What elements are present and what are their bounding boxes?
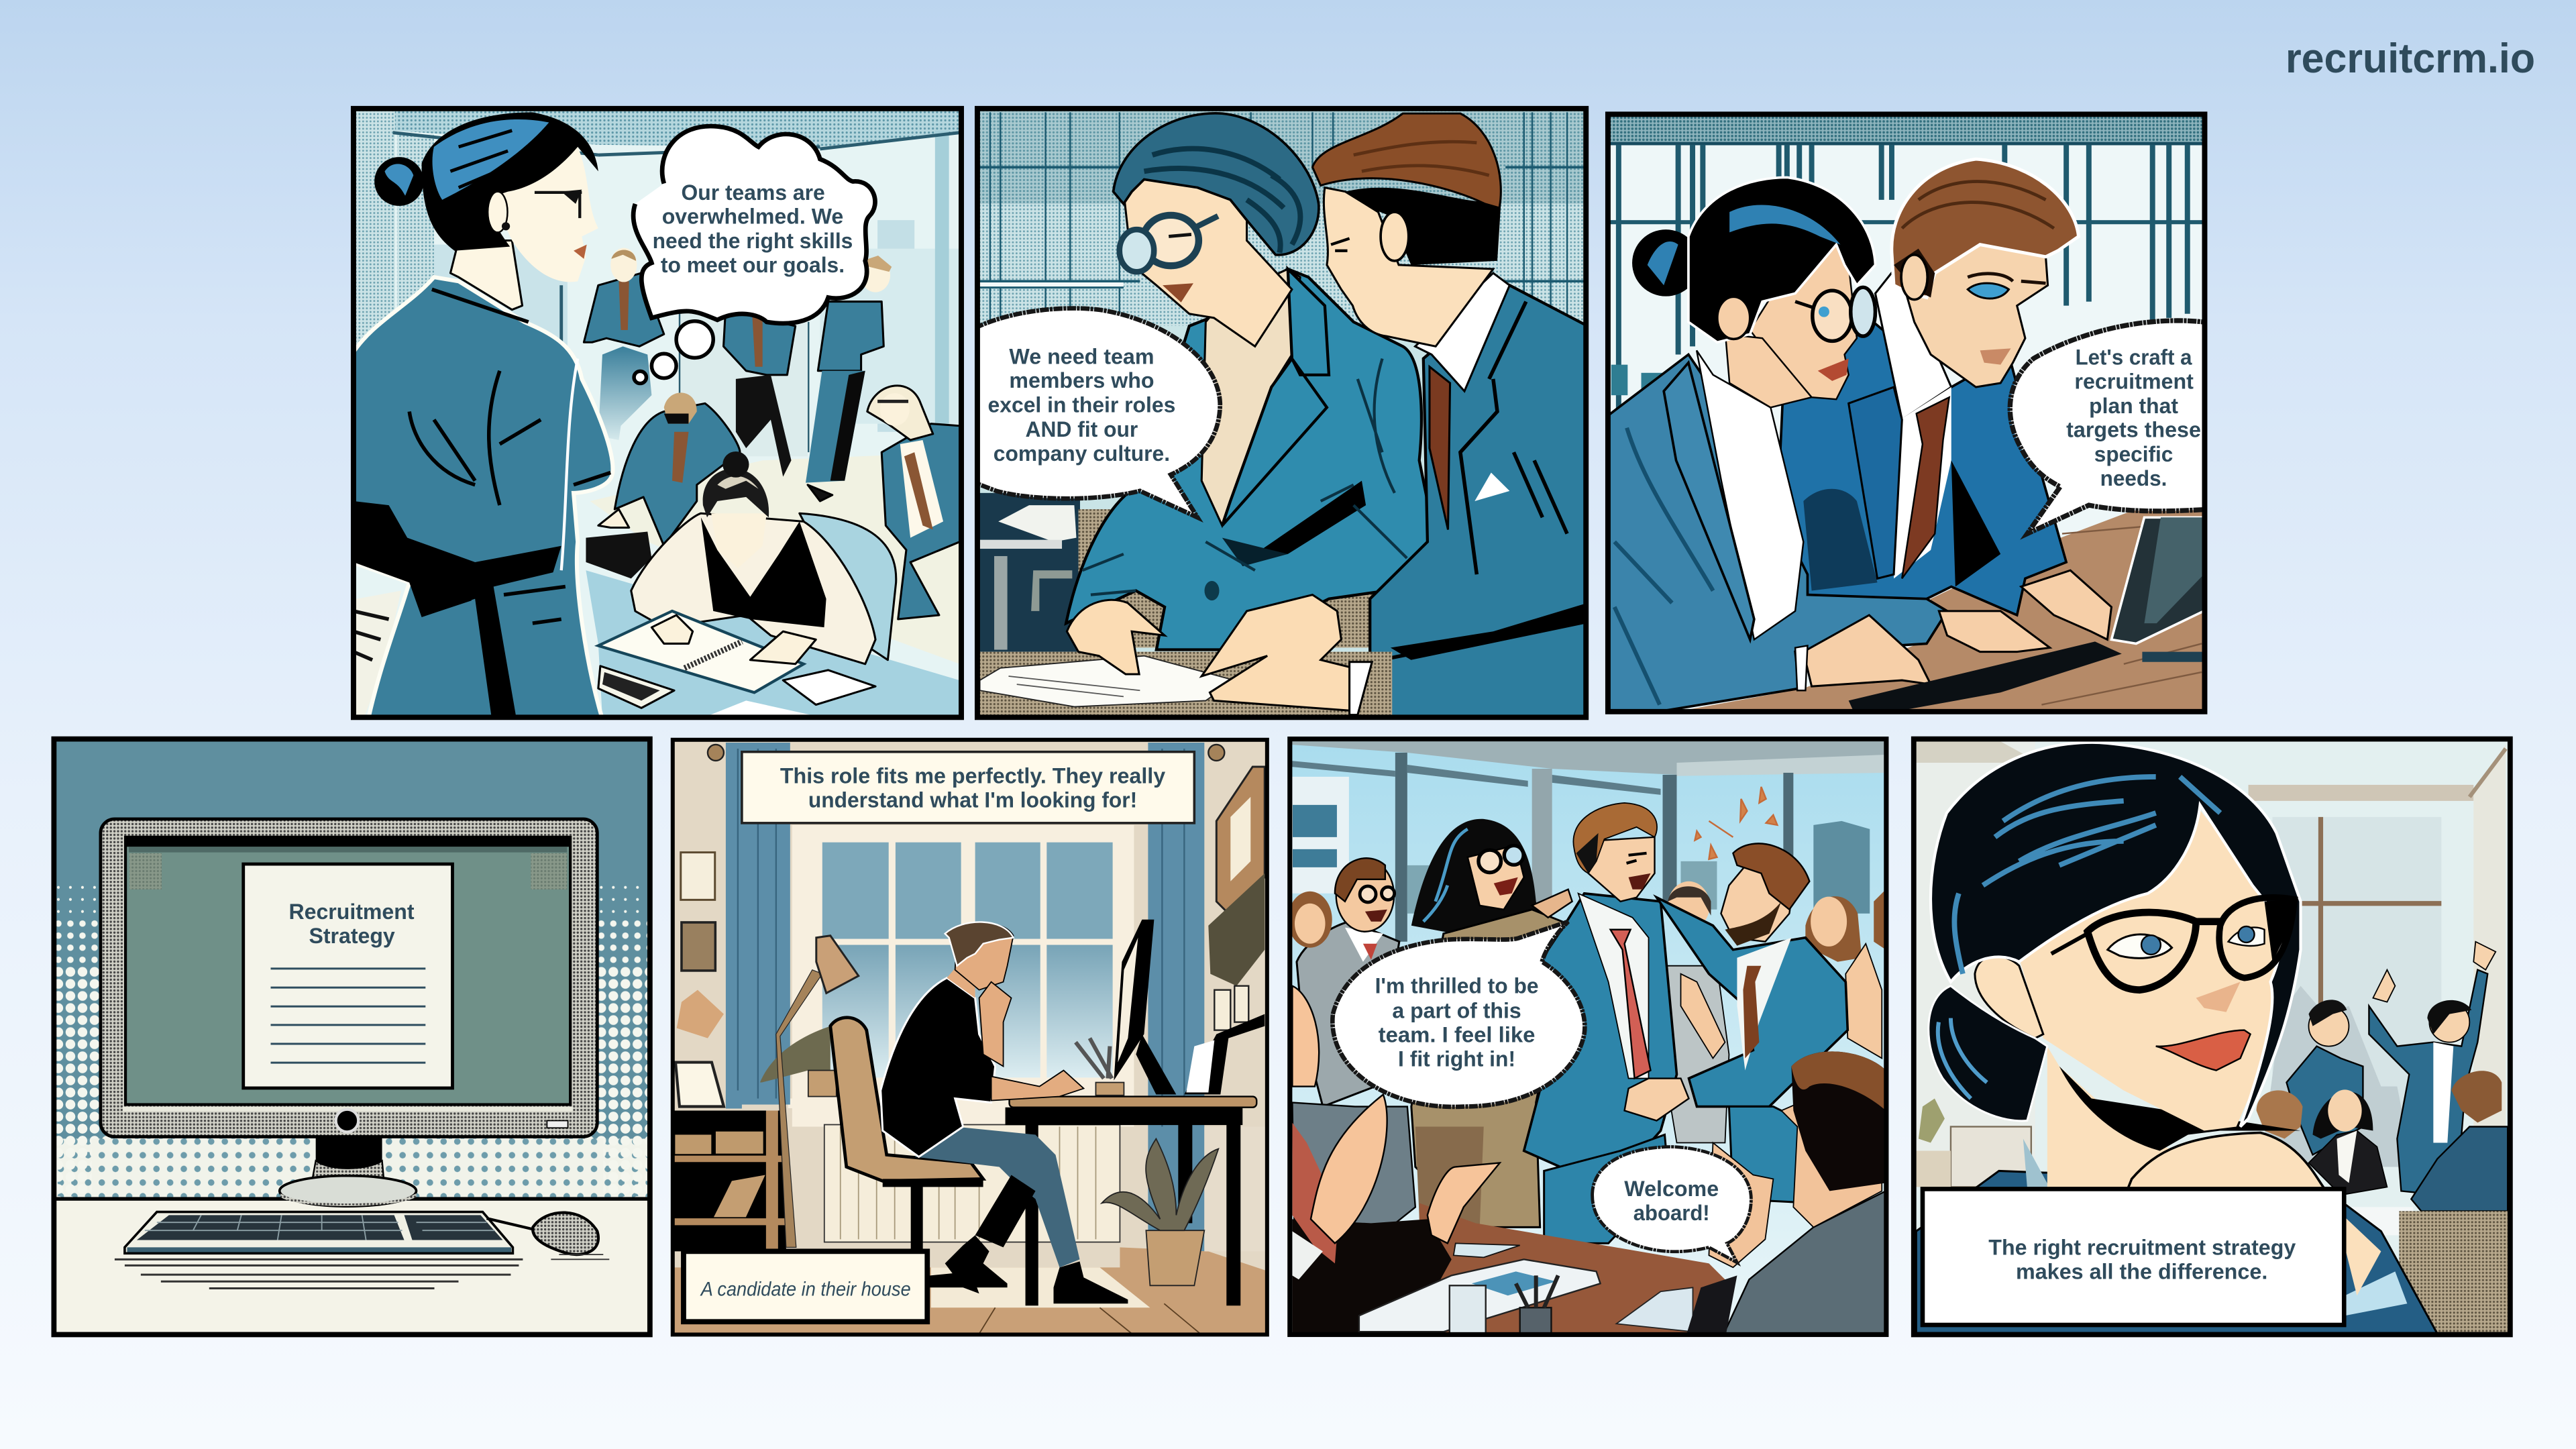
background office worker bbox=[977, 493, 1080, 652]
bearded colleague bbox=[1657, 843, 1847, 1203]
speech bubble with text: Let's craft a bbox=[2076, 345, 2192, 370]
speech bubble with text: needs. bbox=[2100, 466, 2167, 490]
coworker with glasses bbox=[1297, 858, 1399, 1107]
keyboard bbox=[1849, 641, 2122, 710]
panel 1: overwhelmed teams bbox=[351, 106, 964, 720]
speech bubble with text bbox=[975, 309, 1220, 517]
plant in pot bbox=[1102, 1138, 1218, 1285]
caption: speech text box: This role fits me perfectly. They really bbox=[780, 764, 1165, 788]
panel 7 frame bbox=[1914, 739, 2510, 1334]
desk surface bbox=[52, 1199, 652, 1337]
speech bubble: new hire: I'm thrilled to be bbox=[1375, 973, 1539, 998]
figure: seated woman at desk bbox=[631, 451, 896, 664]
panel 5: candidate at home bbox=[670, 737, 1269, 1337]
wall frames bbox=[677, 767, 1265, 1095]
speech bubble with text: company culture. bbox=[994, 441, 1170, 466]
new hire in blue suit bbox=[1524, 803, 1688, 1243]
speech bubble with text: AND fit our bbox=[1026, 417, 1138, 441]
strategy document with text: Strategy bbox=[309, 924, 395, 948]
caption box with text bbox=[1923, 1189, 2344, 1325]
plant on sill bbox=[760, 1026, 830, 1083]
panel 5 frame bbox=[673, 740, 1267, 1334]
strategy document with text: Recruitment bbox=[288, 900, 415, 924]
seated man from behind bbox=[1684, 1051, 1886, 1340]
curtains bbox=[708, 743, 1224, 1269]
desk bbox=[1006, 1097, 1256, 1305]
desk and paper bbox=[977, 652, 1392, 719]
papers, mug and pen cup on table bbox=[1359, 1243, 1693, 1336]
thought bubble with text bbox=[633, 126, 875, 384]
speech bubble with text: We need team bbox=[1009, 344, 1154, 368]
speech bubble: new hire: I fit right in! bbox=[1398, 1047, 1515, 1071]
main woman: hair bbox=[1929, 743, 2301, 1127]
thought bubble with text: need the right skills bbox=[653, 228, 853, 253]
speech bubble with text: targets these bbox=[2066, 417, 2201, 442]
window bbox=[788, 825, 1134, 1127]
radiator bbox=[824, 1125, 1120, 1242]
left clapper bbox=[1292, 986, 1500, 1340]
monitor stand bbox=[280, 1136, 417, 1206]
caption: location box: A candidate in their house bbox=[700, 1278, 911, 1300]
woman at far left bbox=[1288, 892, 1332, 948]
panel 1 frame bbox=[354, 109, 961, 717]
desk bbox=[586, 570, 960, 717]
woman in blue blazer bbox=[1066, 113, 1444, 650]
figure: man with crossed arms bbox=[806, 258, 890, 501]
panel 4 frame bbox=[54, 739, 650, 1334]
caption: speech text box: understand what I'm looking for! bbox=[808, 788, 1137, 812]
man in blue suit bbox=[1779, 159, 2079, 615]
notebook on desk bbox=[598, 611, 875, 717]
colleague in tan with long hair bbox=[1411, 819, 1572, 1227]
panel 6: welcoming the new hire bbox=[1287, 737, 1888, 1340]
panel 3 frame bbox=[1608, 114, 2204, 712]
wooden floor and rug bbox=[674, 1127, 1269, 1336]
man in suit bbox=[1312, 113, 1588, 717]
mouse with cable bbox=[486, 1213, 609, 1259]
desk lamp bbox=[776, 936, 859, 1247]
thought bubble with text: Our teams are bbox=[681, 180, 825, 205]
speech bubble with text: members who bbox=[1009, 368, 1154, 392]
speech bubble with text: recruitment bbox=[2074, 369, 2194, 393]
thought bubble with text: overwhelmed. We bbox=[662, 204, 843, 229]
main woman: jacket and neck bbox=[1916, 1046, 2437, 1334]
speech bubble: welcome: Welcome bbox=[1624, 1177, 1719, 1201]
main woman: face bbox=[1975, 805, 2297, 1130]
panel 6 frame bbox=[1290, 739, 1886, 1334]
panel 3: crafting the recruitment plan bbox=[1605, 111, 2210, 714]
caption: speech text box bbox=[742, 752, 1194, 823]
figure: woman with glasses bbox=[867, 386, 960, 619]
main woman seen from behind bbox=[352, 112, 612, 719]
computer monitor bbox=[2111, 517, 2204, 643]
wooden desk bbox=[1691, 510, 2202, 709]
figure: crouching man bbox=[598, 392, 740, 546]
speech bubble with text bbox=[2010, 321, 2210, 534]
hands on paper bbox=[1067, 595, 1372, 715]
strategy document with text bbox=[244, 864, 452, 1088]
keyboard bbox=[115, 1212, 523, 1288]
skyline buildings bbox=[1291, 777, 1870, 914]
computer monitor bbox=[1075, 920, 1176, 1095]
figure: walking colleague bbox=[584, 248, 664, 440]
speech bubble with text: excel in their roles bbox=[988, 392, 1175, 417]
caption box with text: The right recruitment strategy bbox=[1988, 1236, 2296, 1260]
caption box with text: makes all the difference. bbox=[2016, 1260, 2267, 1284]
keyboard bbox=[598, 666, 674, 708]
speech bubble: welcome bbox=[1593, 1146, 1751, 1263]
figure: man behind cloud bbox=[724, 310, 796, 477]
brand logo text: recruitcrm.io bbox=[2286, 36, 2535, 82]
speech bubble: new hire: team. I feel like bbox=[1379, 1023, 1535, 1047]
panel 2: team members discussion bbox=[975, 106, 1589, 720]
room background bbox=[1915, 741, 2506, 1207]
back crowd clapping bbox=[1665, 881, 1886, 1142]
sparkles bbox=[1695, 787, 1777, 859]
panel 7: the right strategy conclusion bbox=[1911, 737, 2512, 1337]
caption: location box bbox=[684, 1251, 927, 1322]
ceiling and window frames bbox=[1291, 741, 1886, 942]
hands on keyboard bbox=[1795, 570, 2111, 690]
panel 4: recruitment strategy on computer bbox=[52, 737, 652, 1337]
speech bubble with text: specific bbox=[2094, 441, 2173, 466]
speech bubble: new hire: a part of this bbox=[1392, 999, 1521, 1023]
speech bubble: welcome: aboard! bbox=[1633, 1201, 1710, 1225]
woman in blazer bbox=[1608, 177, 1947, 711]
computer monitor bbox=[101, 819, 597, 1136]
glasses and eyes bbox=[2051, 898, 2295, 990]
speech bubble with text: plan that bbox=[2089, 393, 2178, 418]
candidate in black shirt on chair bbox=[830, 922, 1128, 1303]
speech bubble: new hire bbox=[1332, 922, 1585, 1107]
panel 2 frame bbox=[977, 109, 1586, 717]
wooden table bbox=[1347, 1203, 1733, 1340]
shelves and photo bbox=[674, 1063, 786, 1251]
thought bubble with text: to meet our goals. bbox=[661, 252, 845, 277]
background team celebrating bbox=[2257, 942, 2508, 1334]
